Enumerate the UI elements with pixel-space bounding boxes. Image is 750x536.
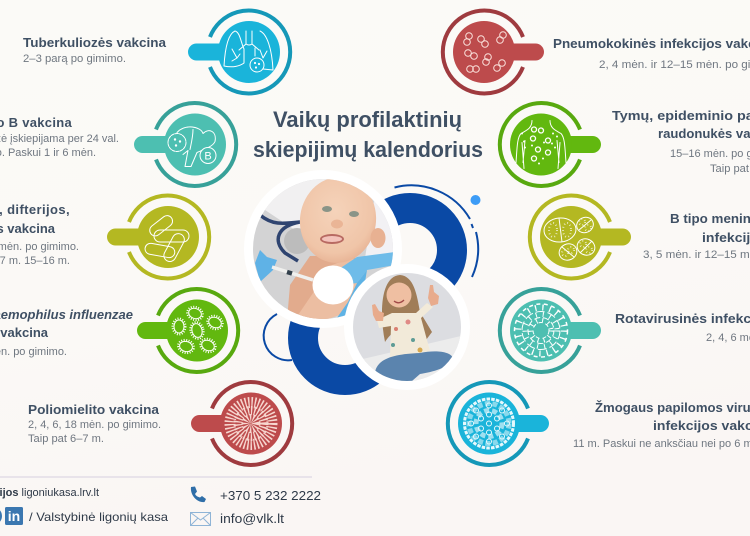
item: Tuberkuliozės icon [188,10,290,94]
syringe [272,267,313,280]
icon: facebook [0,507,2,525]
icon: linkedin: in [8,508,20,524]
item: Tuberkuliozės text [23,35,167,65]
item: Poliomielito text [28,402,161,445]
item: Žmogaus papilomos viruso text [573,400,750,450]
icon: phone [191,486,206,502]
title: skiepijimų kalendorius [253,137,483,162]
central decoration: blue rings [264,185,480,380]
title [253,107,483,162]
footer: social name: / Valstybinė ligonių kasa [29,510,168,524]
item: B tipo meningokokinės icon [530,196,631,278]
face [386,282,412,308]
item: Poliomielito text: Poliomielito vakcina [28,402,160,417]
footer: phone number: +370 5 232 2222 [220,488,321,503]
item: Haemophilus influenzae text [0,307,133,358]
photo: girl with thumbs up [344,264,470,390]
gloves [342,252,393,284]
baby head [300,179,376,262]
item: Pneumokokinės text [553,36,750,71]
item: Tymų, parotito, raudonukės icon [500,103,601,186]
item: Poliomielito text: Taip pat 6–7 m. [28,433,104,445]
footer: email: info@vlk.lt [220,511,284,526]
item: Rotavirusinės icon [500,289,601,372]
item: Tymų, parotito, raudonukės text [612,108,750,175]
item: Tuberkuliozės text: Tuberkuliozės vakcina [23,35,167,50]
baby body [287,255,358,322]
sweater [377,303,433,358]
jeans [375,351,453,381]
item: Haemophilus influenzae icon [137,289,238,372]
item: Kokliušo, difterijos, stabligės icon [107,196,209,278]
item: Hepatito B text [0,115,119,159]
letter B on the liver icon: B [204,150,212,162]
item: Tuberkuliozės text: 2–3 parą po gimimo. [23,53,126,65]
hands [372,304,384,321]
item: Žmogaus papilomos viruso icon [448,382,549,465]
hair [382,275,432,342]
item: B tipo meningokokinės text [643,211,750,261]
item: Kokliušo, difterijos, stabligės text [0,202,79,267]
icon: linkedin [5,507,23,525]
item: Rotavirusinės text [615,311,750,344]
item: Pneumokokinės icon [443,10,544,94]
item: Hepatito B icon [134,103,236,186]
item: Poliomielito icon [191,382,292,465]
item: Poliomielito text: 2, 4, 6, 18 mėn. po gimimo. [28,419,161,431]
icon: mail [190,512,210,526]
photo: baby being vaccinated [244,170,402,328]
title: Vaikų profilaktinių [273,107,462,132]
footer: divider and contacts [0,477,321,526]
